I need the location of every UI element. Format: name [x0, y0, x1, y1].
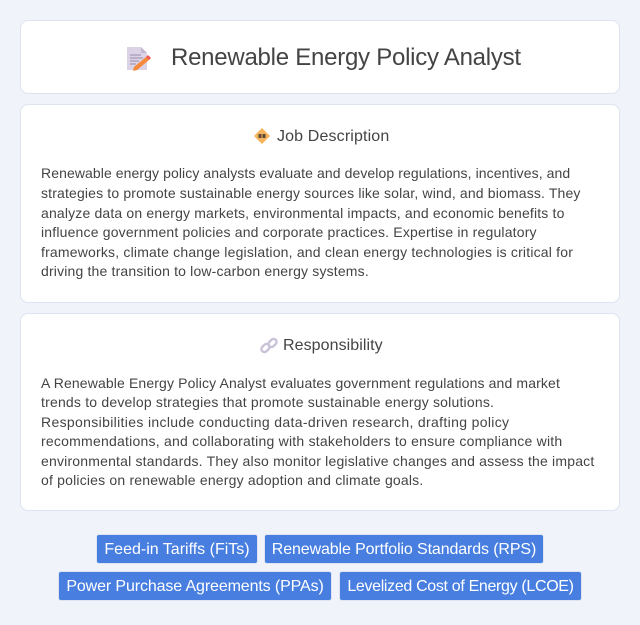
- text: responsibility: trends to develop strategies that promote sustainable energy solutions.: [41, 394, 494, 410]
- text: responsibility: of policies on renewable energy adoption and climate goals.: [41, 472, 423, 488]
- text: job description: driving the transition to low-carbon energy systems.: [41, 263, 369, 279]
- icon: document with pencil: [127, 47, 151, 71]
- tag: power purchase agreements: [58, 571, 332, 601]
- text: job description: Renewable energy policy analysts evaluate and develop regulations, incentives, and: [41, 165, 570, 181]
- text: job description: analyze data on energy markets, environmental impacts, and economic benefits to: [41, 205, 565, 221]
- tag: renewable portfolio standards: Renewable Portfolio Standards (RPS): [272, 541, 536, 558]
- text: job description: strategies to promote sustainable energy sources like solar, wind, and biomass. They: [41, 185, 581, 201]
- text: job description: influence government policies and corporate practices. Expertise in regulatory: [41, 224, 537, 240]
- title: Renewable Energy Policy Analyst: [171, 44, 521, 71]
- heading: responsibility: Responsibility: [283, 337, 383, 354]
- tag: feed-in tariffs: Feed-in Tariffs (FiTs): [104, 541, 250, 558]
- panel: job description: [20, 104, 620, 303]
- text: responsibility: [41, 375, 594, 488]
- heading: job description: Job Description: [277, 128, 389, 145]
- tag: levelized cost of energy: [339, 571, 582, 601]
- title card: [20, 20, 620, 94]
- tag: power purchase agreements: Power Purchase Agreements (PPAs): [66, 578, 324, 595]
- tag: levelized cost of energy: Levelized Cost of Energy (LCOE): [347, 578, 574, 595]
- text: responsibility: A Renewable Energy Policy Analyst evaluates government regulations and market: [41, 375, 560, 391]
- tag: renewable portfolio standards: [264, 534, 544, 564]
- text: job description: frameworks, climate change legislation, and clean energy technologies is critical for: [41, 244, 573, 260]
- text: responsibility: Responsibilities include conducting data-driven research, drafting policy: [41, 414, 509, 430]
- text: job description: [41, 165, 581, 279]
- icon: chain link: [260, 338, 278, 354]
- icon: job diamond: [254, 128, 270, 144]
- text: responsibility: environmental standards. They also monitor legislative changes and assess the impact: [41, 453, 594, 469]
- panel: responsibility: [20, 313, 620, 511]
- tag: feed-in tariffs: [96, 534, 258, 564]
- text: responsibility: recommendations, and collaborating with stakeholders to ensure compliance with: [41, 433, 562, 449]
